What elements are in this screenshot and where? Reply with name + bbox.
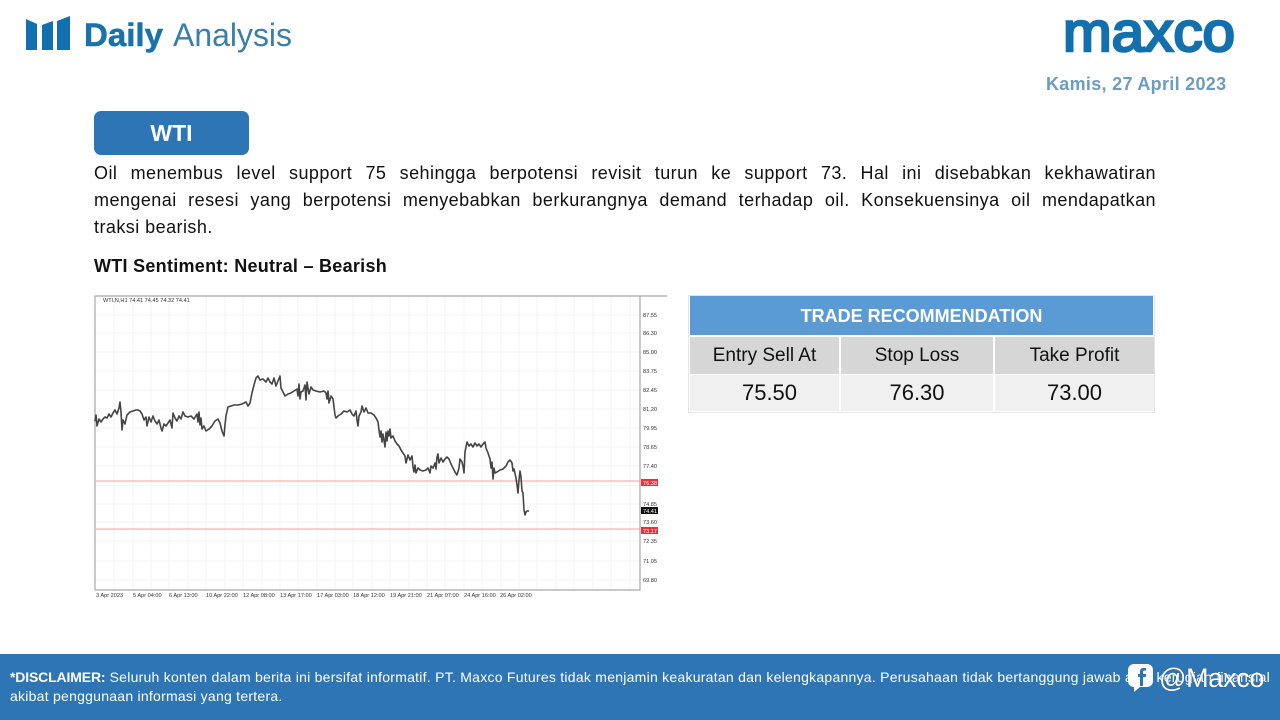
time axis labels: 24 Apr 16:00 [464, 593, 496, 599]
badge: WTI [94, 111, 249, 155]
value: stop loss: 76.30 [889, 380, 945, 405]
table header: TRADE RECOMMENDATION [801, 306, 1042, 326]
date: Kamis, 27 April 2023 [1046, 74, 1226, 94]
time axis labels [96, 593, 532, 599]
price axis labels: 86.30 [643, 331, 657, 337]
price tags [641, 479, 658, 535]
text block: analysis paragraph [94, 163, 1156, 237]
price axis labels: 69.80 [643, 578, 657, 584]
chart frame [95, 296, 667, 590]
price axis labels: 79.95 [643, 426, 657, 432]
time axis labels: 6 Apr 13:00 [169, 593, 198, 599]
column: take profit label: Take Profit [1030, 344, 1119, 366]
disclaimer text: akibat penggunaan informasi yang tertera. [10, 688, 283, 704]
price tags: 73.17 [643, 529, 657, 535]
value: take profit [995, 375, 1154, 411]
heading: WTI sentiment: WTI Sentiment: Neutral – Bearish [94, 256, 387, 276]
value: entry sell: 75.50 [742, 380, 797, 405]
time axis labels: 19 Apr 21:00 [390, 593, 422, 599]
table header [690, 296, 1153, 335]
price axis labels: 83.75 [643, 369, 657, 375]
price axis labels: 77.40 [643, 464, 657, 470]
price tags: 74.41 [643, 509, 657, 515]
time axis labels: 5 Apr 04:00 [133, 593, 162, 599]
header logo: Daily Analysis [26, 16, 292, 53]
support and resistance lines [96, 481, 640, 529]
disclaimer text [10, 669, 1270, 704]
text block: analysis paragraph: Oil menembus level support 75 sehingga berpotensi revisit turun ke support 73. Hal ini disebabkan kekhawatiran [94, 163, 1156, 183]
price axis labels: 74.85 [643, 502, 657, 508]
time axis labels: 13 Apr 17:00 [280, 593, 312, 599]
time axis labels: 26 Apr 02:00 [500, 593, 532, 599]
chart symbol label: WTI,N,H1 74.41 74.45 74.32 74.41 [103, 298, 190, 304]
value: entry sell [690, 375, 839, 411]
text block: analysis paragraph: traksi bearish. [94, 217, 213, 237]
price axis labels [643, 313, 657, 584]
icon: bar chart logo mark [26, 16, 70, 50]
column: entry sell at label [690, 337, 839, 374]
table: trade recommendation [688, 295, 1155, 413]
price axis labels: 82.45 [643, 388, 657, 394]
value: stop loss [841, 375, 993, 411]
price axis labels: 81.20 [643, 407, 657, 413]
column: entry sell at label: Entry Sell At [713, 344, 816, 366]
time axis labels: 10 Apr 22:00 [206, 593, 238, 599]
heading: Daily Analysis: Daily [84, 17, 163, 53]
disclaimer text: *DISCLAIMER: Seluruh konten dalam berita ini bersifat informatif. PT. Maxco Futures tidak menjamin keakuratan dan kelengkapannya. Perusahaan tidak bertanggung jawab atas kerugian finansial [10, 669, 1270, 685]
watermark: facebook @Maxco [1128, 663, 1264, 693]
column: stop loss label: Stop Loss [875, 344, 959, 366]
chart: WTI H1 price [94, 295, 667, 599]
column: stop loss label [841, 337, 993, 374]
price line [95, 376, 529, 515]
icon: facebook [1128, 664, 1153, 692]
price tags: 76.38 [643, 481, 657, 487]
badge: WTI: WTI [150, 120, 193, 146]
text block: analysis paragraph: mengenai resesi yang berpotensi menyebabkan berkurangnya demand terhadap oil. Konsekuensinya oil mendapatkan [94, 190, 1156, 210]
price axis labels: 71.05 [643, 559, 657, 565]
time axis labels: 17 Apr 03:00 [317, 593, 349, 599]
price axis labels: 87.55 [643, 313, 657, 319]
value: take profit: 73.00 [1047, 380, 1102, 405]
footer disclaimer bar [0, 654, 1280, 720]
watermark handle: @Maxco [1159, 663, 1264, 693]
price axis labels: 85.00 [643, 350, 657, 356]
price axis labels: 72.35 [643, 539, 657, 545]
heading: Daily Analysis: Analysis [173, 17, 292, 53]
time axis labels: 21 Apr 07:00 [427, 593, 459, 599]
column: take profit label [995, 337, 1154, 374]
price axis labels: 78.65 [643, 445, 657, 451]
price axis labels: 73.60 [643, 520, 657, 526]
time axis labels: 12 Apr 08:00 [243, 593, 275, 599]
time axis labels: 3 Apr 2023 [96, 593, 123, 599]
heading: Daily Analysis [84, 17, 292, 53]
time axis labels: 18 Apr 12:00 [353, 593, 385, 599]
